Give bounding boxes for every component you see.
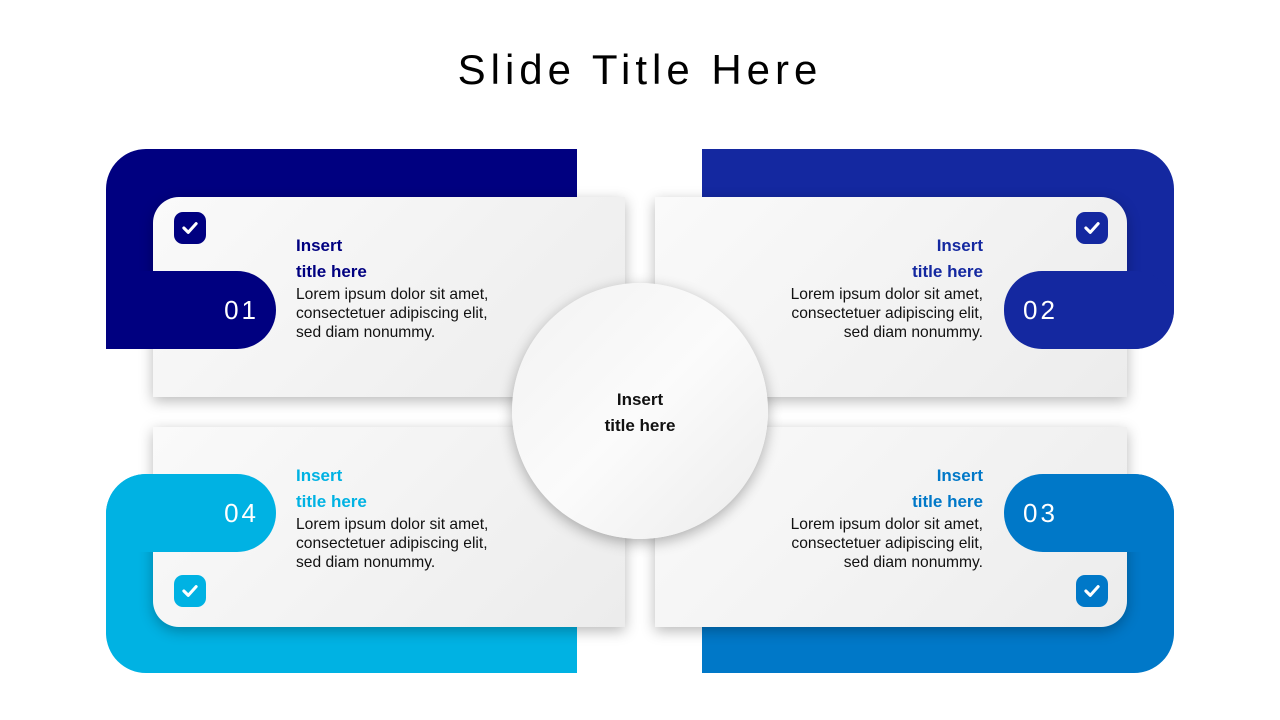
text 03: sed diam nonummy. (844, 554, 983, 571)
text 03: consectetuer adipiscing elit, (791, 535, 983, 552)
text 01: title here (296, 262, 367, 281)
text 01: Lorem ipsum dolor sit amet, (296, 286, 488, 303)
center circle: title here (605, 416, 675, 435)
text 01: Insert (296, 236, 342, 255)
text 02: consectetuer adipiscing elit, (791, 305, 983, 322)
text 03: title here (912, 492, 983, 511)
text 04 (296, 466, 488, 571)
center circle (512, 283, 768, 539)
number tab 04 (106, 474, 276, 552)
text 02: Lorem ipsum dolor sit amet, (791, 286, 983, 303)
icon: check 02 (1076, 212, 1108, 244)
number tab 01 (106, 271, 276, 349)
text 01: sed diam nonummy. (296, 324, 435, 341)
number tab 02: 02 (1023, 295, 1058, 325)
number tab 03: 03 (1023, 498, 1058, 528)
number tab 01: 01 (224, 295, 259, 325)
text 04: sed diam nonummy. (296, 554, 435, 571)
number tab 03 (1004, 474, 1174, 552)
panel: 02 (647, 149, 1174, 409)
text 01: consectetuer adipiscing elit, (296, 305, 488, 322)
text 04: title here (296, 492, 367, 511)
text 01 (296, 236, 488, 341)
title: Slide Title Here (458, 46, 822, 93)
panel: 01 (106, 149, 633, 409)
text 04: Lorem ipsum dolor sit amet, (296, 516, 488, 533)
center circle: Insert (617, 390, 663, 409)
text 02: title here (912, 262, 983, 281)
icon: check 03 (1076, 575, 1108, 607)
text 02: Insert (937, 236, 983, 255)
text 03 (791, 466, 983, 571)
number tab 02 (1004, 271, 1174, 349)
text 03: Insert (937, 466, 983, 485)
panel: 03 (647, 423, 1174, 673)
color band 02 (702, 149, 1174, 349)
panel: 04 (106, 423, 633, 673)
color band 04 (106, 474, 577, 673)
text 03: Lorem ipsum dolor sit amet, (791, 516, 983, 533)
color band 03 (702, 474, 1174, 673)
text 02 (791, 236, 983, 341)
text 02: sed diam nonummy. (844, 324, 983, 341)
text 04: consectetuer adipiscing elit, (296, 535, 488, 552)
number tab 04: 04 (224, 498, 259, 528)
color band 01 (106, 149, 577, 349)
icon: check 01 (174, 212, 206, 244)
text 04: Insert (296, 466, 342, 485)
icon: check 04 (174, 575, 206, 607)
